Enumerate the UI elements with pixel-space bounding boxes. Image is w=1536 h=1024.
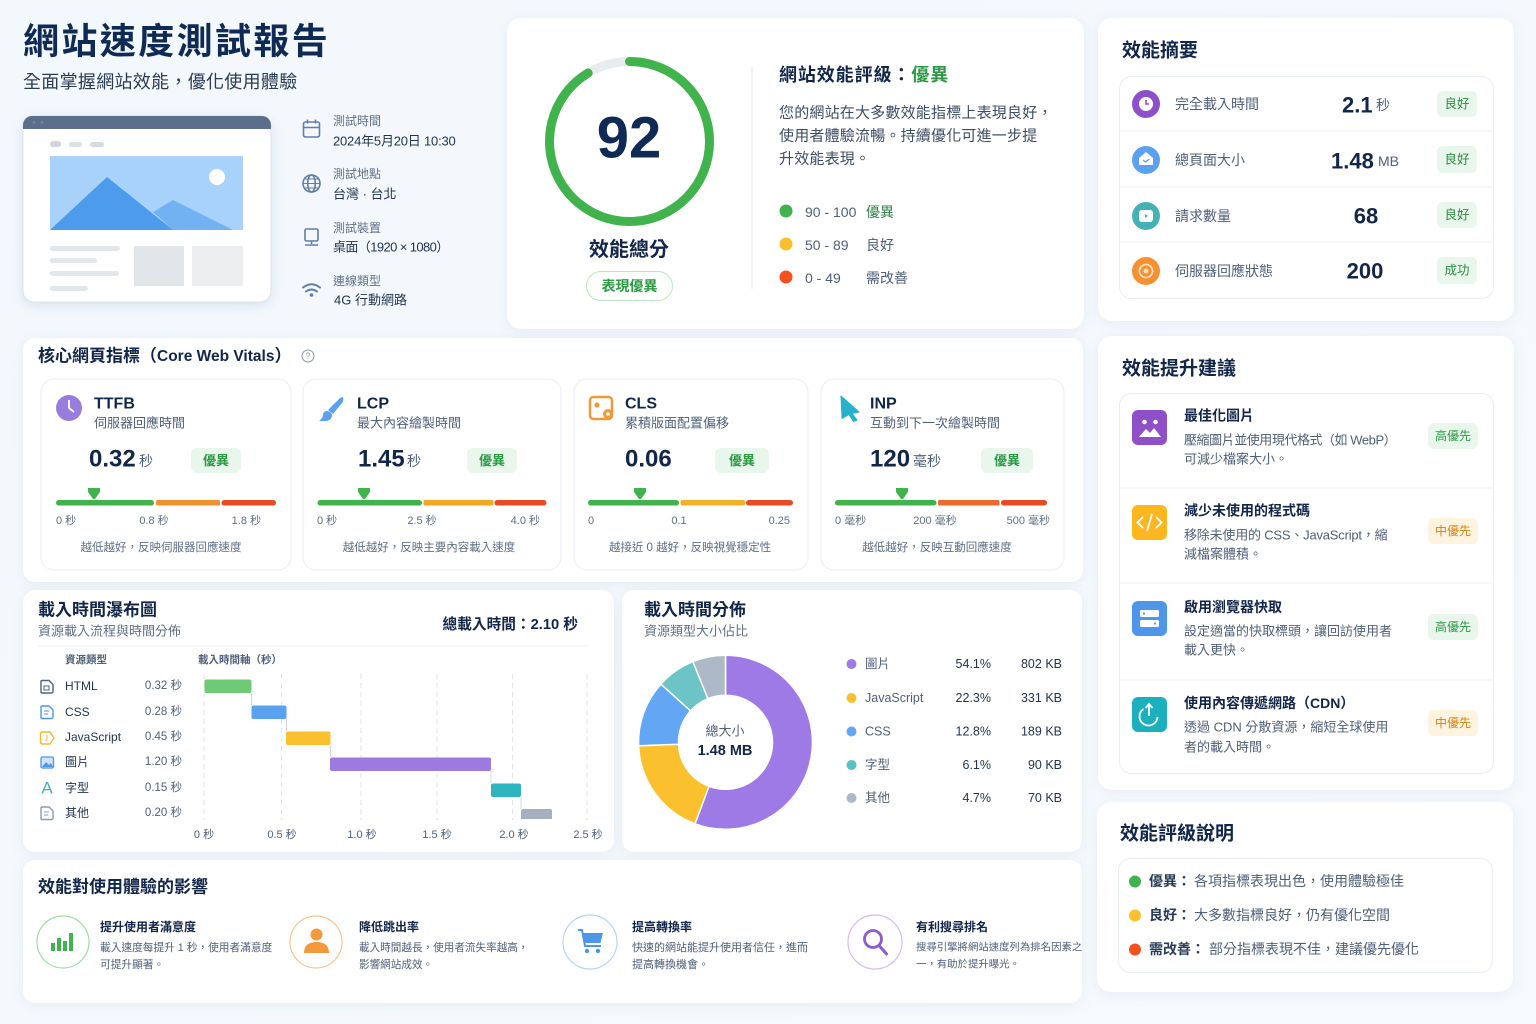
card: TTFB: TTFB xyxy=(94,396,135,412)
resource: fonts: 0.15 秒 xyxy=(145,780,182,794)
legend: JavaScript: 22.3% xyxy=(956,691,991,705)
time axis: 0.5 秒 xyxy=(267,827,297,841)
resource: fonts xyxy=(41,778,182,798)
resource: other: 0.20 秒 xyxy=(145,805,182,819)
legend: images: 54.1% xyxy=(956,657,991,671)
recommendation: reduce unused code: 中優先 xyxy=(1435,523,1471,538)
legend: JavaScript: JavaScript xyxy=(865,691,924,705)
icon: cursor xyxy=(841,396,859,422)
legend: fonts: 字型 xyxy=(865,757,890,772)
row: server status: 成功 xyxy=(1444,264,1470,278)
row: request count: 請求數量 xyxy=(1175,208,1231,224)
rating: excellent: 各項指標表現出色，使用體驗極佳 xyxy=(1194,873,1404,889)
panel: recommendations xyxy=(1098,336,1514,790)
time axis: 2.5 秒 xyxy=(573,827,603,841)
waterfall bars xyxy=(204,680,552,819)
recommendation: optimize images xyxy=(1132,408,1478,466)
panel: performance summary xyxy=(1098,18,1514,321)
time axis: 1.5 秒 xyxy=(422,827,452,841)
card: CLS: 優異 xyxy=(729,453,755,468)
panel: overall score xyxy=(507,18,1084,329)
donut center label: 總大小 xyxy=(705,724,745,738)
card: LCP: 越低越好，反映主要內容載入速度 xyxy=(343,540,516,554)
recommendation: CDN: 使用內容傳遞網路（CDN） xyxy=(1184,695,1354,711)
card: INP: 500 毫秒 xyxy=(1007,513,1050,527)
resource: CSS: CSS xyxy=(65,705,90,719)
row: full load time: 完全載入時間 xyxy=(1175,96,1259,112)
card: TTFB xyxy=(41,379,291,570)
card: CLS xyxy=(574,379,808,570)
icon: user xyxy=(290,916,342,968)
card: LCP: 0 秒 xyxy=(317,513,337,527)
donut chart xyxy=(639,655,812,829)
legend: JavaScript xyxy=(846,691,1062,705)
impact: satisfaction: 提升使用者滿意度 xyxy=(100,919,196,934)
card: CLS: 0.06 xyxy=(625,446,672,472)
icon: desktop xyxy=(305,229,318,245)
recommendation: reduce unused code xyxy=(1132,502,1478,562)
row: full load time xyxy=(1132,90,1477,118)
icon: server xyxy=(1132,601,1167,636)
waterfall subtitle: 資源載入流程與時間分佈 xyxy=(38,624,181,638)
resource: HTML xyxy=(41,678,182,693)
card: INP: 200 毫秒 xyxy=(913,513,957,527)
row: total page size: 良好 xyxy=(1444,152,1470,166)
recommendation: CDN xyxy=(1132,695,1478,754)
threshold bar xyxy=(318,488,546,506)
impact: conversion: 快速的網站能提升使用者信任，進而 xyxy=(632,940,808,954)
legend: other: 其他 xyxy=(865,791,891,805)
recommendation: reduce unused code: 減檔案體積。 xyxy=(1184,546,1262,562)
donut center label: 1.48 MB xyxy=(698,743,752,759)
recommendation: browser cache: 啟用瀏覽器快取 xyxy=(1184,599,1282,615)
impact: conversion: 提高轉換機會。 xyxy=(632,957,709,971)
resource: images: 圖片 xyxy=(65,755,89,769)
donut legend xyxy=(846,657,1062,805)
card: INP: INP xyxy=(870,396,897,412)
row: server status xyxy=(1132,257,1477,285)
impact: satisfaction: 載入速度每提升 1 秒，使用者滿意度 xyxy=(100,941,273,954)
time axis xyxy=(194,827,603,841)
card: TTFB: 越低越好，反映伺服器回應速度 xyxy=(80,540,242,554)
recommendation: browser cache: 載入更快。 xyxy=(1184,642,1249,658)
column headers: 載入時間軸（秒） xyxy=(198,653,282,666)
legend: CSS: CSS xyxy=(865,724,891,738)
icon: globe xyxy=(303,175,320,192)
card: CLS: 累積版面配置偏移 xyxy=(625,416,729,430)
resource: CSS xyxy=(41,704,182,719)
score gauge xyxy=(550,62,710,222)
card: LCP: 優異 xyxy=(479,453,505,468)
impact: search ranking: 有利搜尋排名 xyxy=(916,919,988,934)
card: TTFB: 伺服器回應時間 xyxy=(94,416,185,430)
legend: other: 70 KB xyxy=(1028,791,1062,805)
icon: layout shift xyxy=(590,397,613,419)
card: INP: 越低越好，反映互動回應速度 xyxy=(862,540,1012,554)
icon: calendar xyxy=(304,120,320,137)
card: LCP: LCP xyxy=(357,396,389,412)
row: server status: 200 xyxy=(1347,258,1383,284)
card: TTFB: 0.32 xyxy=(89,446,136,472)
resource: other xyxy=(41,805,182,820)
card: INP: 毫秒 xyxy=(913,453,941,469)
icon: bar chart xyxy=(37,916,89,968)
card: CLS: 越接近 0 越好，反映視覺穩定性 xyxy=(609,540,771,554)
rating description: 升效能表現。 xyxy=(779,150,870,168)
rating heading: 網站效能評級：優異 xyxy=(779,64,949,85)
test location: 台灣 · 台北 xyxy=(333,186,397,202)
card: TTFB: 0.8 秒 xyxy=(139,513,169,527)
row: full load time: 良好 xyxy=(1444,96,1470,111)
legend: JavaScript: 331 KB xyxy=(1021,691,1062,705)
impact: bounce rate xyxy=(290,916,528,971)
threshold bar xyxy=(588,488,793,506)
title: 網站速度測試報告 xyxy=(23,20,330,62)
connection type: 4G 行動網路 xyxy=(334,292,407,308)
icon: help xyxy=(302,350,314,362)
card: LCP: 4.0 秒 xyxy=(511,513,540,527)
recommendation: CDN: 透過 CDN 分散資源，縮短全球使用 xyxy=(1184,720,1388,734)
test device xyxy=(333,220,449,254)
resource: fonts: A xyxy=(41,778,53,798)
legend: CSS: 12.8% xyxy=(956,724,991,738)
subtitle: 全面掌握網站效能，優化使用體驗 xyxy=(23,72,298,92)
legend: fonts xyxy=(846,757,1062,772)
resource: JavaScript xyxy=(40,729,182,744)
test location: 測試地點 xyxy=(333,166,381,181)
resource: images: 1.20 秒 xyxy=(145,754,182,768)
recommendation: browser cache xyxy=(1132,599,1478,658)
card: LCP: 秒 xyxy=(407,453,421,469)
recommendation: optimize images: 最佳化圖片 xyxy=(1184,408,1254,424)
row: request count: 良好 xyxy=(1444,207,1470,222)
panel: impact on user experience xyxy=(23,860,1082,1003)
icon: code xyxy=(1132,505,1167,540)
panel: waterfall chart xyxy=(23,590,614,852)
card: LCP: 2.5 秒 xyxy=(407,513,437,527)
test time: 2024年5月20日 10:30 xyxy=(333,134,456,148)
rating: good: 大多數指標良好，仍有優化空間 xyxy=(1194,907,1390,923)
score label: 效能總分 xyxy=(589,237,669,261)
donut center label xyxy=(698,724,752,759)
recommendation: optimize images: 可減少檔案大小。 xyxy=(1184,452,1288,466)
icon: wifi xyxy=(303,284,320,297)
icon: image xyxy=(1132,410,1167,445)
row: total page size: 總頁面大小 xyxy=(1175,152,1245,168)
impact: search ranking: 搜尋引擎將網站速度列為排名因素之 xyxy=(916,940,1082,954)
rating: needs improvement: 部分指標表現不佳，建議優先優化 xyxy=(1209,941,1419,957)
rating description xyxy=(779,104,1053,168)
time axis: 1.0 秒 xyxy=(347,827,377,841)
resource: JavaScript: JavaScript xyxy=(65,730,122,744)
score badge: 表現優異 xyxy=(602,278,658,294)
row: request count xyxy=(1132,202,1477,230)
impact heading: 效能對使用體驗的影響 xyxy=(38,876,208,896)
panel: core web vitals xyxy=(23,338,1083,582)
distribution heading: 載入時間分佈 xyxy=(644,600,746,620)
resource: fonts: 字型 xyxy=(65,780,89,795)
row: total page size xyxy=(1132,146,1477,174)
recommendation: optimize images: 壓縮圖片並使用現代格式（如 WebP） xyxy=(1184,432,1396,448)
rating explanation heading: 效能評級說明 xyxy=(1120,822,1234,844)
threshold bar xyxy=(56,488,276,506)
row: total page size: MB xyxy=(1378,153,1399,169)
resource: JavaScript: 0.45 秒 xyxy=(145,729,182,743)
score legend: 50 - 89 xyxy=(805,237,849,253)
test device: 桌面（1920 × 1080） xyxy=(333,240,449,254)
recommendation: optimize images: 高優先 xyxy=(1435,428,1471,443)
recommendation: reduce unused code: 減少未使用的程式碼 xyxy=(1184,502,1310,518)
waterfall heading: 載入時間瀑布圖 xyxy=(38,600,157,620)
card: LCP xyxy=(303,379,561,570)
legend: images: 圖片 xyxy=(865,657,890,671)
panel: rating explanation xyxy=(1097,802,1513,992)
impact: conversion: 提高轉換率 xyxy=(632,919,692,934)
recommendation: browser cache: 高優先 xyxy=(1435,619,1471,634)
card: CLS: 0.1 xyxy=(671,515,687,527)
column headers xyxy=(65,653,282,666)
test location xyxy=(333,166,397,202)
website preview illustration xyxy=(23,116,271,302)
impact: bounce rate: 降低跳出率 xyxy=(359,919,419,934)
legend: fonts: 90 KB xyxy=(1028,758,1062,772)
impact: satisfaction xyxy=(37,916,273,971)
legend: fonts: 6.1% xyxy=(962,758,991,772)
connection type xyxy=(333,273,407,308)
recommendation: CDN: 中優先 xyxy=(1435,715,1471,730)
test device: 測試裝置 xyxy=(333,220,381,235)
score legend: 需改善 xyxy=(866,270,908,286)
card: INP xyxy=(821,379,1064,570)
card: LCP: 1.45 xyxy=(358,446,405,472)
score gauge: 92 xyxy=(597,106,661,170)
resource: other: 其他 xyxy=(65,806,89,820)
test time: 測試時間 xyxy=(333,113,381,128)
card: LCP: 最大內容繪製時間 xyxy=(357,416,461,430)
test info list xyxy=(303,113,456,308)
row: server status: 伺服器回應狀態 xyxy=(1175,263,1273,279)
icon: magnifier xyxy=(848,915,902,969)
resource: HTML: 0.32 秒 xyxy=(145,678,182,692)
recommendation: browser cache: 設定適當的快取標頭，讓回訪使用者 xyxy=(1184,624,1392,638)
card: INP: 互動到下一次繪製時間 xyxy=(870,416,1000,430)
rating description: 使用者體驗流暢。持續優化可進一步提 xyxy=(779,126,1037,144)
rating: needs improvement: 需改善： xyxy=(1149,941,1205,957)
icon: refresh arrow xyxy=(1132,697,1167,732)
icon: help: ? xyxy=(305,351,311,361)
panel: load distribution xyxy=(622,590,1082,852)
legend: other xyxy=(846,791,1062,805)
score legend: 90 - 100 xyxy=(805,204,857,220)
row: full load time: 秒 xyxy=(1376,97,1390,113)
card: TTFB: 1.8 秒 xyxy=(232,513,261,527)
card: CLS: 0 xyxy=(588,515,594,527)
recommendations heading: 效能提升建議 xyxy=(1122,358,1236,380)
impact: conversion xyxy=(563,915,808,971)
connection type: 連線類型 xyxy=(333,273,381,288)
icon: brush xyxy=(319,397,343,421)
legend: images xyxy=(846,657,1062,671)
recommendation: CDN: 者的載入時間。 xyxy=(1184,740,1275,754)
summary heading: 效能摘要 xyxy=(1122,38,1198,62)
threshold bar xyxy=(835,488,1047,506)
test time xyxy=(333,113,456,148)
score legend xyxy=(780,204,908,286)
recommendation: reduce unused code: 移除未使用的 CSS、JavaScript，縮 xyxy=(1184,528,1388,542)
icon: cart xyxy=(563,915,617,969)
impact: search ranking: 一，有助於提升曝光。 xyxy=(916,958,1020,970)
resource: images xyxy=(41,754,182,769)
legend: other: 4.7% xyxy=(962,791,991,805)
row: total page size: 1.48 xyxy=(1331,148,1374,174)
card: INP: 120 xyxy=(870,446,910,472)
score legend: 良好 xyxy=(866,237,894,253)
time axis: 0 秒 xyxy=(194,827,214,841)
legend: CSS: 189 KB xyxy=(1021,724,1062,738)
icon: clock xyxy=(56,395,82,421)
card: TTFB: 優異 xyxy=(203,453,229,468)
distribution subtitle: 資源類型大小佔比 xyxy=(644,624,748,638)
card: TTFB: 秒 xyxy=(139,453,153,469)
resource list xyxy=(40,678,182,820)
column headers: 資源類型 xyxy=(65,653,107,666)
impact: satisfaction: 可提升顯著。 xyxy=(100,958,164,971)
impact: search ranking xyxy=(848,915,1082,970)
card: INP: 0 毫秒 xyxy=(835,513,866,527)
score legend: 0 - 49 xyxy=(805,270,841,286)
score legend: 優異 xyxy=(866,204,894,220)
rating: good: 良好： xyxy=(1149,907,1191,923)
legend: images: 802 KB xyxy=(1021,657,1062,671)
vitals heading: 核心網頁指標（Core Web Vitals） xyxy=(38,346,291,366)
impact: bounce rate: 載入時間越長，使用者流失率越高， xyxy=(359,941,528,954)
time axis: 2.0 秒 xyxy=(499,827,529,841)
score badge xyxy=(586,272,672,300)
row: full load time: 2.1 xyxy=(1342,92,1373,118)
rating description: 您的網站在大多數效能指標上表現良好， xyxy=(779,104,1053,122)
card: CLS: CLS xyxy=(625,396,657,412)
total load time: 總載入時間：2.10 秒 xyxy=(443,615,578,633)
card: INP: 優異 xyxy=(994,453,1020,468)
rating: excellent: 優異： xyxy=(1149,873,1191,889)
legend: CSS xyxy=(846,724,1062,738)
resource: CSS: 0.28 秒 xyxy=(145,704,182,718)
card: CLS: 0.25 xyxy=(769,515,790,527)
row: request count: 68 xyxy=(1354,204,1378,228)
card: TTFB: 0 秒 xyxy=(56,513,76,527)
impact: bounce rate: 影響網站成效。 xyxy=(359,958,433,971)
resource: HTML: HTML xyxy=(65,679,98,693)
